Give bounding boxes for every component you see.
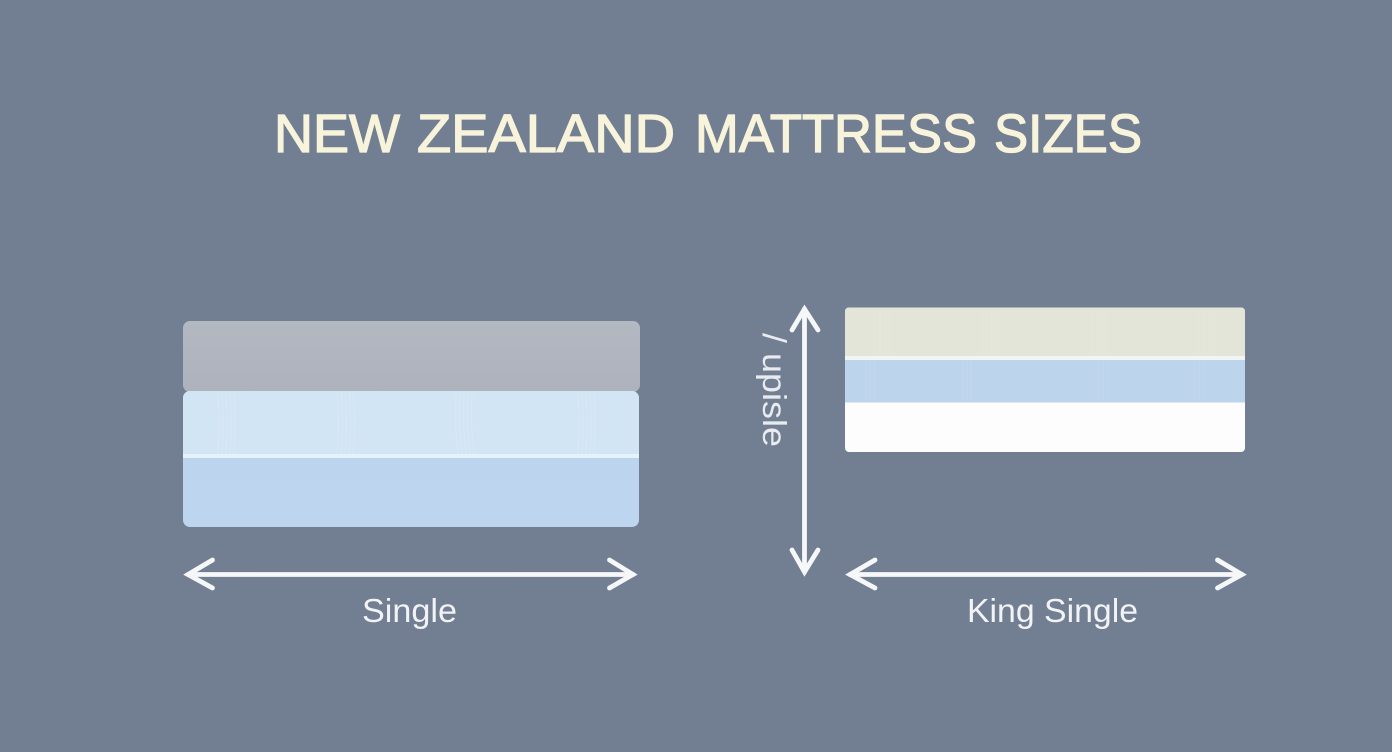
quilting marks bbox=[866, 308, 1214, 402]
arrow: king single height bbox=[792, 309, 818, 572]
arrow: single width bbox=[188, 560, 633, 588]
title bbox=[274, 104, 1142, 164]
label: single: Single bbox=[362, 592, 457, 629]
middle layer: light blue bbox=[183, 391, 639, 454]
title: MATTRESS bbox=[695, 104, 977, 164]
label: king single: King Single bbox=[967, 592, 1138, 629]
label: rotated side text: / upisle bbox=[756, 333, 793, 447]
bottom layer: pale blue bbox=[183, 391, 639, 527]
top layer: grey bbox=[183, 321, 640, 392]
title: ZEALAND bbox=[417, 104, 675, 164]
panel: single mattress bbox=[183, 321, 640, 527]
top layer: cream bbox=[845, 308, 1245, 356]
arrow: king single width bbox=[850, 560, 1242, 588]
panel: king single mattress bbox=[845, 308, 1245, 452]
layer seam bbox=[845, 356, 1245, 360]
title: SIZES bbox=[994, 104, 1142, 164]
bottom layer: white bbox=[845, 308, 1245, 452]
middle layer: blue bbox=[845, 360, 1245, 402]
layer seam bbox=[183, 454, 639, 458]
quilting marks bbox=[218, 392, 595, 454]
title: NEW bbox=[274, 104, 400, 164]
